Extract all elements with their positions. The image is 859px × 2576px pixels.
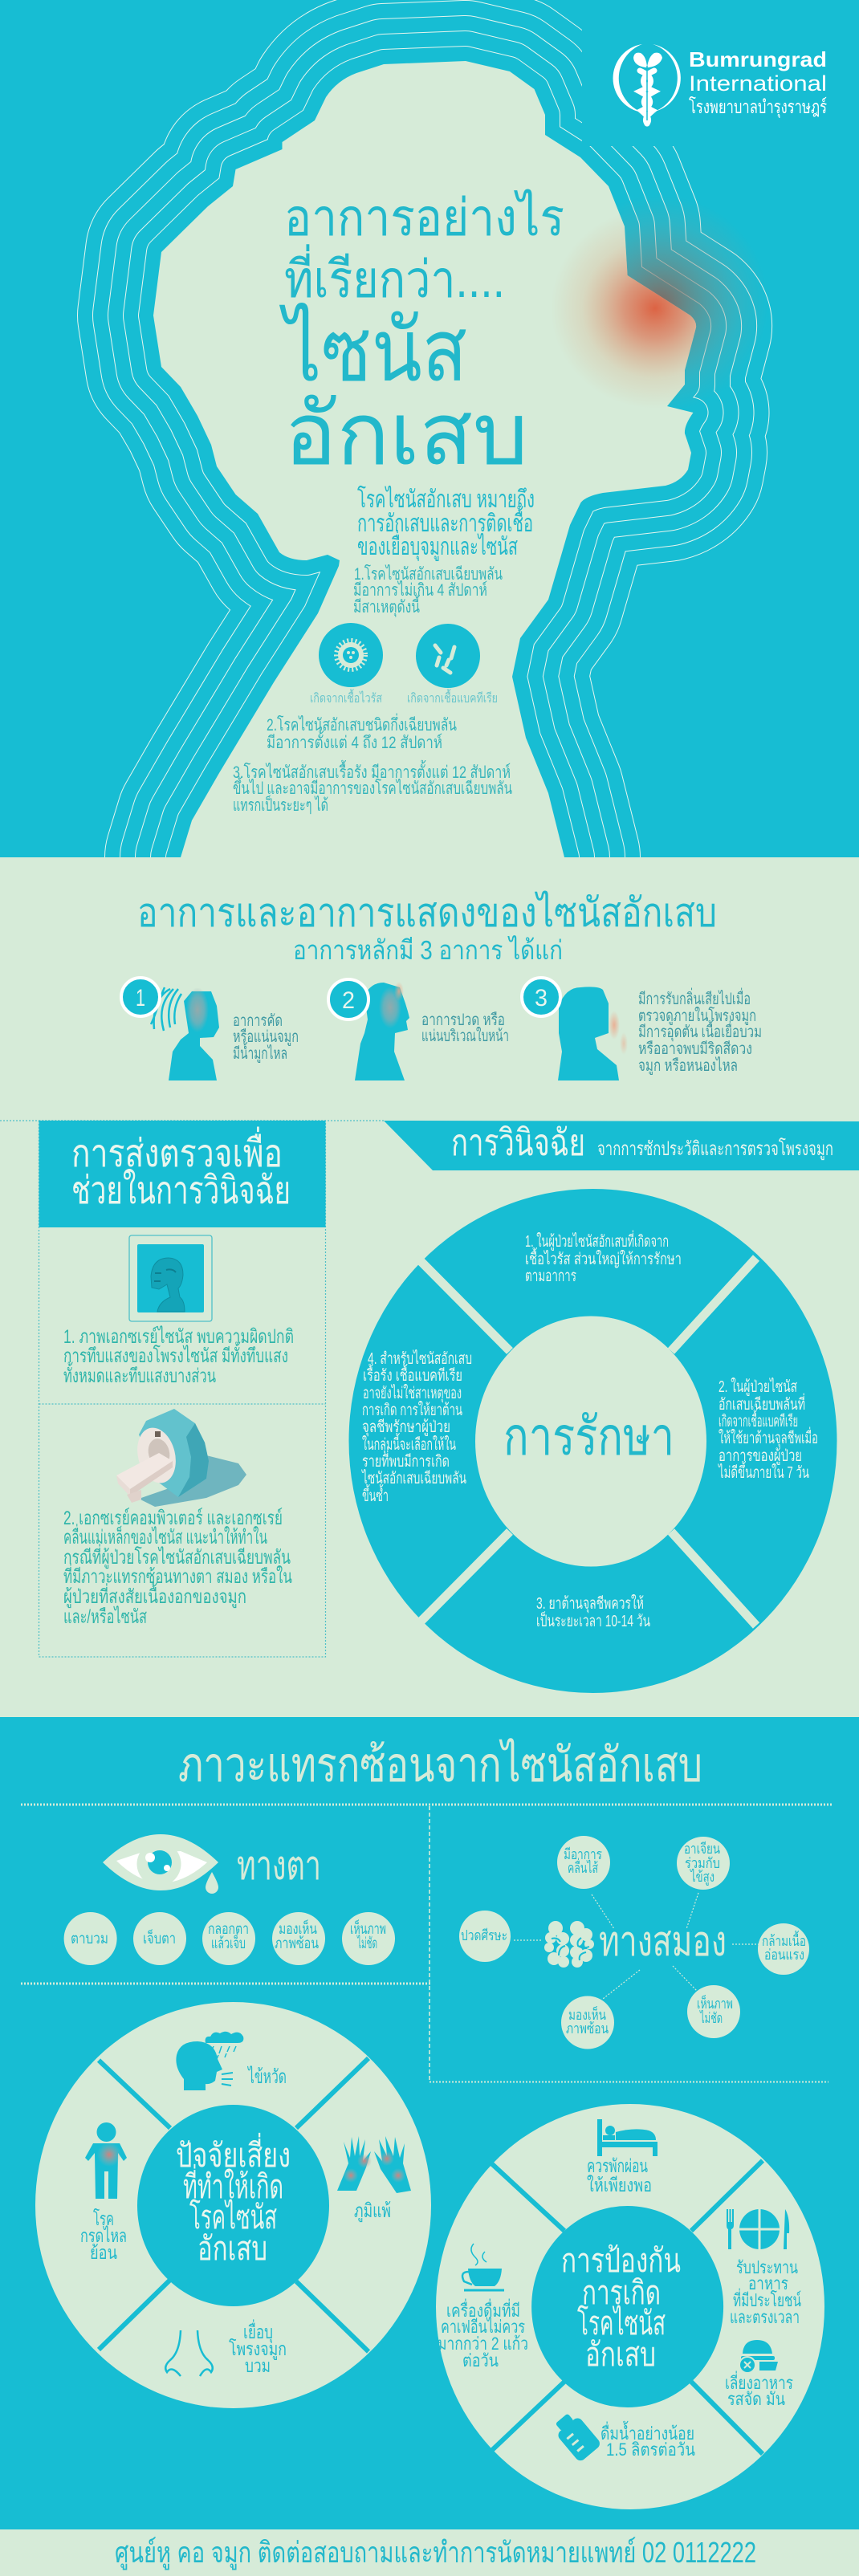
text: treatment 4: 4. สำหรับไซนัสอักเสบ (368, 1349, 472, 1368)
panel: hero silhouette (77, 0, 772, 857)
text block: definition (357, 485, 535, 562)
label: swollen sinus: บวม (245, 2355, 271, 2376)
label: swollen sinus (229, 2319, 287, 2376)
text: treatment 1 (525, 1230, 682, 1285)
text: treatment 4: ไซนัสอักเสบเฉียบพลัน (361, 1469, 466, 1487)
list: eye symptoms: กลอกตา (208, 1921, 249, 1938)
title (279, 189, 564, 482)
icon: head coughing (176, 2032, 243, 2090)
text: treatment 4: การเกิด การให้ยาต้าน (362, 1401, 462, 1419)
text: treatment 3 (536, 1594, 650, 1630)
logo (613, 44, 827, 124)
label: eat healthy: อาหาร (748, 2273, 788, 2293)
figure 2: facial pain: 2 (342, 987, 355, 1014)
title: อาการอย่างไร (284, 189, 564, 246)
label: limit caffeine (438, 2298, 528, 2370)
text: x-ray: การทึบแสงของโพรงไซนัส มีทั้งทึบแสง (63, 1341, 288, 1367)
text block: definition: โรคไซนัสอักเสบ หมายถึง (357, 485, 535, 513)
heading: symptoms: อาการและอาการแสดงของไซนัสอักเสบ (137, 890, 717, 935)
chart: treatment wheel (348, 1189, 837, 1693)
icon: burger crossed (739, 2340, 778, 2373)
label: acid reflux: ย้อน (90, 2242, 117, 2263)
label: acid reflux: โรค (93, 2208, 114, 2229)
text: treatment 4: ขึ้นซ้ำ (362, 1484, 389, 1505)
text: treatment 4: อาจยังไม่ใช่สาเหตุของ (363, 1384, 462, 1403)
text: symptom 2: แน่นบริเวณใบหน้า (421, 1027, 509, 1045)
panel: symptoms (0, 857, 859, 1717)
text: x-ray: 1. ภาพเอกซเรย์ไซนัส พบความผิดปกติ (63, 1325, 294, 1348)
text: symptom 1: มีน้ำมูกไหล (233, 1042, 287, 1064)
icon: plate and cutlery (727, 2209, 789, 2249)
text: symptom 3: หรืออาจพบมีริดสีดวง (638, 1040, 752, 1058)
text: symptom 1: หรือแน่นจมูก (233, 1028, 299, 1047)
title: อักเสบ (284, 385, 528, 482)
icon: eye (103, 1834, 218, 1894)
text: treatment 4: เรื้อรัง เชื้อแบคทีเรีย (363, 1364, 462, 1385)
text: risk center: โรคไซนัส (189, 2199, 277, 2236)
text: treatment 1: ตามอาการ (525, 1268, 576, 1285)
label: eat healthy (730, 2257, 801, 2327)
list: eye symptoms: เห็นภาพ (350, 1919, 386, 1938)
list: brain symptoms: ร่วมกับ (685, 1855, 720, 1871)
text: CT and MRI: ผู้ป่วยที่สงสัยเนื้องอกของจมูก (63, 1582, 246, 1609)
label: rest: ให้เพียงพอ (587, 2175, 652, 2196)
text: symptom 3: มีการรับกลิ่นเสียไปเมื่อ (638, 987, 751, 1008)
heading: eye complications: ทางตา (237, 1843, 321, 1888)
icon: bacteria (416, 624, 480, 688)
label: acid reflux (80, 2208, 127, 2263)
figure 3: loss of smell: 3 (535, 985, 548, 1011)
text: CT and MRI: คลื่นแม่เหล็กของไซนัส แนะนำให้ทำใน (63, 1524, 267, 1548)
label: limit caffeine: ต่อวัน (462, 2350, 499, 2370)
text block: subacute type: มีอาการตั้งแต่ 4 ถึง 12 สัปดาห์ (267, 730, 442, 752)
text: symptom 3: จมูก หรือหนองไหล (638, 1056, 738, 1076)
text: treatment 2: 2. ในผู้ป่วยไซนัส (719, 1378, 797, 1397)
text: center treatment: การรักษา (503, 1406, 674, 1466)
header: diagnosis: การวินิจฉัย (451, 1121, 585, 1163)
footer (0, 2529, 859, 2576)
label: eat healthy: ที่มีประโยชน์ (733, 2288, 801, 2310)
logo: International (689, 71, 827, 96)
text: treatment 2: อักเสบเฉียบพลันที่ (719, 1393, 805, 1414)
label: avoid rich food (725, 2370, 793, 2409)
text: treatment 4: ในกลุ่มนี้จะเลือกให้ใน (362, 1433, 456, 1455)
icon: x-ray film (129, 1235, 212, 1321)
panel: diagnostic tests (0, 1121, 384, 1657)
text block: acute type (353, 564, 503, 617)
list: brain symptoms: กล้ามเนื้อ (762, 1931, 806, 1949)
text: prevention center: โรคไซนัส (577, 2305, 666, 2342)
text: CT and MRI: กรณีที่ผู้ป่วยโรคไซนัสอักเสบเฉียบพลัน (63, 1544, 291, 1569)
label: avoid rich food: รสจัด มัน (727, 2389, 785, 2409)
icon captions: เกิดจากเชื้อไวรัส (310, 689, 382, 706)
list: eye symptoms: มองเห็น (279, 1919, 317, 1938)
icon: brain (544, 1921, 594, 1968)
text: treatment 4: รายที่พบมีการเกิด (362, 1450, 450, 1471)
text: risk center: อักเสบ (197, 2230, 267, 2267)
figure 1: congestion (121, 978, 219, 1080)
text: CT and MRI: 2. เอกซเรย์คอมพิวเตอร์ และเอกซเรย์ (63, 1507, 283, 1529)
text: symptom 1 (233, 1012, 299, 1064)
chart: prevention wheel (436, 2104, 824, 2509)
label: rest (587, 2155, 652, 2196)
list: brain symptoms: อ่อนแรง (764, 1947, 804, 1963)
figure 1: congestion: 1 (136, 985, 145, 1011)
list: eye symptoms: ไม่ชัด (356, 1935, 377, 1952)
icon: bed (597, 2119, 657, 2156)
heading: brain complications: ทางสมอง (599, 1919, 727, 1965)
icon: water bottle (551, 2409, 602, 2463)
text block: subacute type (267, 713, 457, 752)
list: brain symptoms: คลื่นไส้ (568, 1858, 598, 1876)
text: symptom 3: มีการอุดตัน เนื้อเยื่อบวม (638, 1020, 762, 1042)
header: diagnosis (384, 1121, 859, 1170)
text: treatment 2 (718, 1378, 818, 1482)
text: symptom 2: อาการปวด หรือ (421, 1011, 505, 1029)
text: symptom 2 (421, 1011, 509, 1045)
label: limit caffeine: คาเฟอีนไม่ควร (441, 2317, 525, 2337)
text block: chronic type: 3.โรคไซนัสอักเสบเรื้อรัง มีอาการตั้งแต่ 12 สัปดาห์ (233, 760, 511, 782)
list: brain symptoms: อาเจียน (684, 1841, 720, 1857)
label: swollen sinus: โพรงจมูก (229, 2338, 287, 2360)
title: ที่เรียกว่า.... (284, 244, 505, 308)
chart: risk factors wheel (35, 2002, 431, 2408)
logo: Bumrungrad (689, 47, 827, 71)
icon: coffee cup (462, 2244, 504, 2290)
list: eye symptoms: ภาพซ้อน (275, 1935, 319, 1952)
text: treatment 3: 3. ยาต้านจุลชีพควรให้ (536, 1594, 644, 1614)
text: treatment 3: เป็นระยะเวลา 10-14 วัน (536, 1610, 650, 1630)
text: x-ray (63, 1325, 294, 1387)
title: ไซนัส (279, 302, 467, 399)
text: x-ray: ทั้งหมดและทึบแสงบางส่วน (63, 1361, 216, 1387)
icon: virus (319, 623, 383, 687)
list: brain symptoms: มีอาการ (564, 1846, 602, 1862)
text: risk center (176, 2133, 291, 2267)
text block: chronic type: แทรกเป็นระยะๆ ได้ (233, 794, 328, 815)
label: drink water: ดื่มน้ำอย่างน้อย (600, 2421, 694, 2444)
text: treatment 1: 1. ในผู้ป่วยไซนัสอักเสบที่เกิดจาก (525, 1230, 669, 1251)
label: eat healthy: และตรงเวลา (730, 2307, 800, 2327)
text block: definition: ของเยื่อบุจมูกและไซนัส (357, 530, 518, 562)
list: brain symptoms: เห็นภาพ (697, 1994, 733, 2012)
text: risk center: ปัจจัยเสี่ยง (176, 2133, 291, 2174)
text: symptom 3 (638, 987, 762, 1076)
label: limit caffeine: มากกว่า 2 แก้ว (438, 2334, 528, 2354)
list: brain symptoms: ไข้สูง (690, 1868, 714, 1886)
text: treatment 2: อาการของผู้ป่วย (719, 1447, 802, 1466)
text: treatment 2: ไม่ดีขึ้นภายใน 7 วัน (718, 1461, 809, 1482)
list: brain symptoms: ไม่ชัด (699, 2009, 723, 2026)
list: brain symptoms: ภาพซ้อน (566, 2021, 609, 2037)
icon: person (85, 2122, 127, 2199)
text: symptom 1: อาการคัด (233, 1012, 283, 1030)
figure 2: facial pain (328, 979, 409, 1080)
label: cold: ไข้หวัด (247, 2065, 287, 2088)
text: prevention center (561, 2242, 681, 2373)
list: brain symptoms: ปวดศีรษะ (461, 1927, 507, 1943)
list: eye symptoms: ตาบวม (71, 1931, 108, 1947)
text block: acute type: มีสาเหตุดังนี้ (353, 595, 420, 617)
text: prevention center: การเกิด (582, 2274, 661, 2311)
icon captions (310, 689, 498, 706)
icon: nose (165, 2330, 213, 2376)
text: symptom 3: ตรวจดูภายในโพรงจมูก (638, 1007, 756, 1026)
subheading: symptoms: อาการหลักมี 3 อาการ ได้แก่ (293, 935, 563, 965)
icon: MRI machine (116, 1409, 246, 1507)
heading: complications: ภาวะแทรกซ้อนจากไซนัสอักเสบ (178, 1737, 702, 1792)
icon: hands (337, 2136, 411, 2193)
list: eye symptoms: แล้วเจ็บ (211, 1933, 246, 1952)
text block: subacute type: 2.โรคไซนัสอักเสบชนิดกึ่งเฉียบพลัน (267, 713, 457, 735)
connectors: brain (514, 1893, 759, 1999)
text block: definition: การอักเสบและการติดเชื้อ (357, 506, 533, 537)
text: CT and MRI: และ/หรือไซนัส (63, 1605, 147, 1628)
text block: chronic type: ขึ้นไป และอาจมีอาการของโรคไซนัสอักเสบเฉียบพลัน (233, 776, 512, 798)
text block: chronic type (233, 760, 512, 815)
figure 3: loss of smell (522, 978, 628, 1080)
text: CT and MRI: ที่มีภาวะแทรกซ้อนทางตา สมอง หรือใน (63, 1563, 292, 1588)
header: tests: ช่วยในการวินิจฉัย (71, 1168, 291, 1212)
label: allergy: ภูมิแพ้ (354, 2200, 391, 2223)
text: treatment 4: จุลชีพรักษาผู้ป่วย (362, 1418, 450, 1437)
text: CT and MRI (63, 1507, 292, 1628)
label: acid reflux: กรดไหล (80, 2225, 127, 2246)
text: prevention center: การป้องกัน (561, 2242, 681, 2279)
label: avoid rich food: เลี่ยงอาหาร (725, 2370, 793, 2393)
header: tests (39, 1121, 326, 1227)
text: treatment 1: เชื้อไวรัส ส่วนใหญ่ให้การรักษา (525, 1247, 682, 1268)
list: eye symptoms (64, 1912, 395, 1965)
label: drink water: 1.5 ลิตรต่อวัน (606, 2440, 695, 2460)
label: drink water (600, 2421, 695, 2460)
icon captions: เกิดจากเชื้อแบคทีเรีย (407, 689, 498, 706)
label: limit caffeine: เครื่องดื่มที่มี (446, 2298, 520, 2321)
label: rest: ควรพักผ่อน (587, 2155, 648, 2176)
list: brain symptoms: มองเห็น (568, 2005, 606, 2023)
header: tests: การส่งตรวจเพื่อ (71, 1126, 283, 1175)
text block: acute type: 1.โรคไซนัสอักเสบเฉียบพลัน (354, 564, 503, 584)
list: brain symptoms (459, 1836, 809, 2049)
label: swollen sinus: เยื่อบุ (243, 2319, 273, 2343)
text block: acute type: มีอาการไม่เกิน 4 สัปดาห์ (353, 580, 487, 600)
text: risk center: ที่ทำให้เกิด (183, 2164, 283, 2205)
text: treatment 4 (361, 1349, 472, 1505)
text: prevention center: อักเสบ (585, 2336, 656, 2373)
list: eye symptoms: เจ็บตา (143, 1928, 176, 1947)
label: eat healthy: รับประทาน (736, 2257, 798, 2277)
